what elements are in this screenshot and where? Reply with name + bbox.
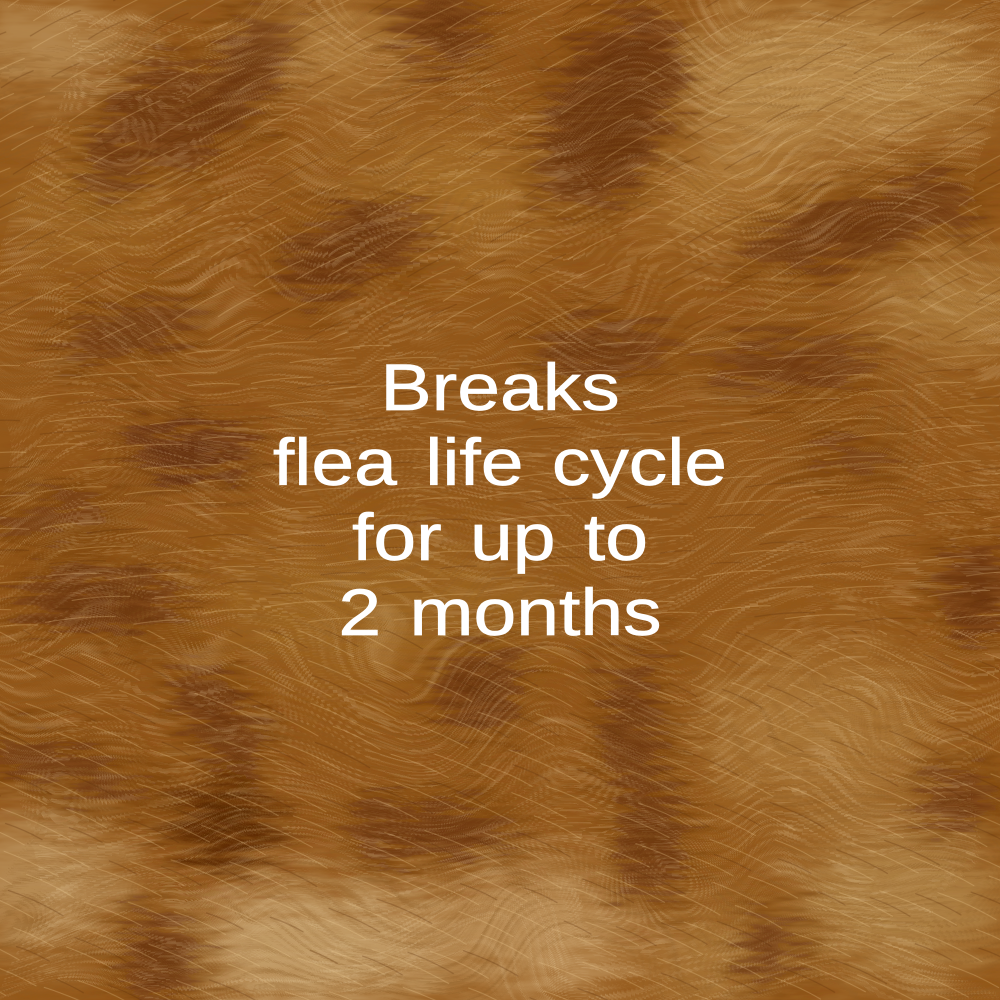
- headline: 2 months: [338, 575, 662, 649]
- headline: flea life cycle: [273, 425, 727, 499]
- headline: for up to: [352, 500, 648, 574]
- headline: [273, 350, 727, 649]
- fur strands: lower area: [0, 630, 1000, 1000]
- fur strands: upper area: [0, 0, 1000, 340]
- headline: Breaks: [380, 350, 620, 424]
- fur strands: middle area: [0, 340, 1000, 630]
